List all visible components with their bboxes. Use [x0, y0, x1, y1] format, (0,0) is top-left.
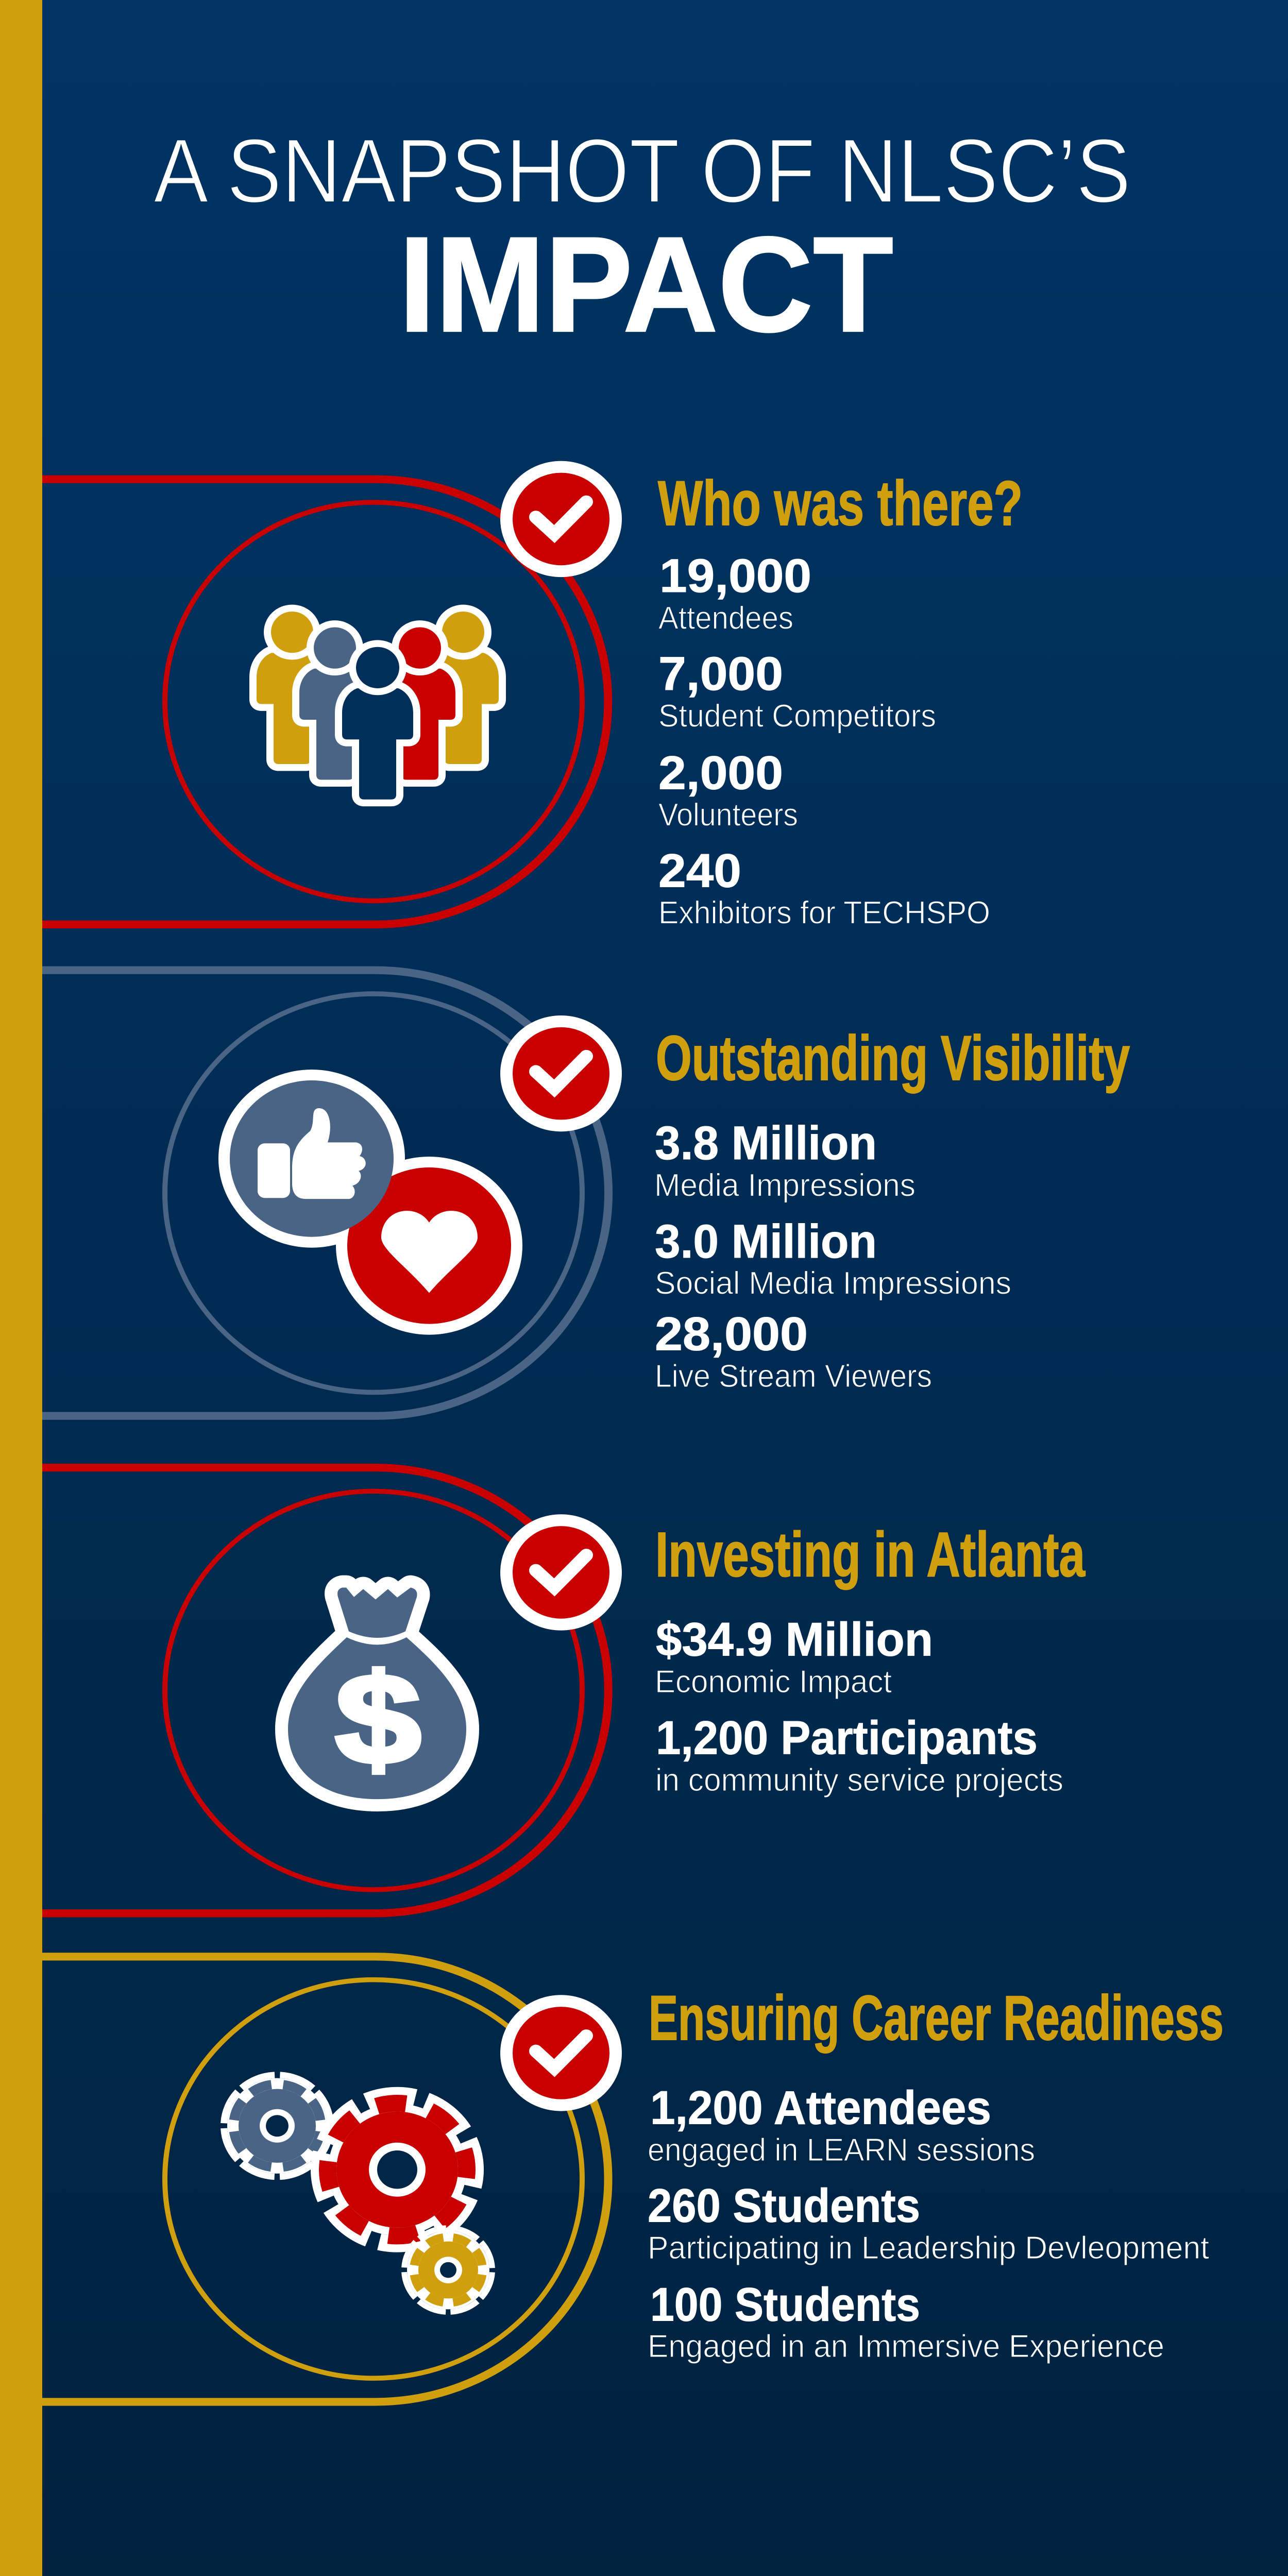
- panel: who was there: [42, 467, 1023, 930]
- stat label: Attendees: [658, 600, 793, 636]
- stat: 2,000: [658, 747, 783, 799]
- outer rounded frame: [42, 970, 608, 1416]
- icon: gold gear: [402, 2226, 495, 2314]
- inner ring: [165, 994, 582, 1392]
- panel: outstanding visibility: [42, 970, 1130, 1416]
- stat: $34.9 Million: [656, 1613, 933, 1666]
- stat: 100 Students: [650, 2278, 920, 2331]
- stat label: Live Stream Viewers: [655, 1358, 932, 1394]
- icon: money bag: [288, 1588, 466, 1799]
- stat label: Economic Impact: [655, 1664, 892, 1700]
- stat label: Exhibitors for TECHSPO: [658, 895, 990, 930]
- stat label: in community service projects: [655, 1762, 1063, 1798]
- gold side bar: [0, 0, 42, 2576]
- panel: ensuring career readiness: [42, 1957, 1224, 2402]
- icon: check badge: [506, 2001, 616, 2105]
- section text: [658, 468, 1023, 930]
- stat: 19,000: [659, 549, 811, 602]
- icon: red gear: [295, 2072, 499, 2267]
- section text: [655, 1519, 1086, 1798]
- stat label: Engaged in an Immersive Experience: [648, 2328, 1164, 2364]
- heading: Investing in Atlanta: [655, 1519, 1086, 1590]
- outer rounded frame: [42, 1468, 608, 1913]
- stat: 260 Students: [648, 2179, 920, 2232]
- stat: 1,200 Participants: [656, 1711, 1038, 1764]
- inner ring: [165, 1980, 582, 2378]
- outer rounded frame: [42, 479, 608, 924]
- stat label: Volunteers: [658, 797, 798, 833]
- title: [154, 120, 1131, 360]
- stat label: Participating in Leadership Devleopment: [648, 2230, 1209, 2266]
- inner ring: [165, 1491, 582, 1890]
- stat label: Student Competitors: [658, 698, 936, 734]
- stat: 7,000: [658, 647, 783, 700]
- icon: gears: [221, 2072, 499, 2314]
- icon: check badge: [506, 1021, 616, 1126]
- stat: 28,000: [655, 1307, 808, 1360]
- section text: [648, 1983, 1224, 2364]
- stat: 1,200 Attendees: [650, 2081, 991, 2134]
- section text: [654, 1023, 1130, 1394]
- icon: slate gear: [221, 2073, 333, 2179]
- icon: like and heart badges: [218, 1070, 522, 1335]
- icon: check badge: [506, 1520, 616, 1624]
- inner ring: [165, 502, 582, 901]
- stat: 3.0 Million: [655, 1215, 877, 1267]
- stat: 240: [658, 844, 741, 897]
- panel: investing in atlanta: [42, 1468, 1086, 1913]
- icon: check badge: [506, 467, 616, 571]
- stat label: engaged in LEARN sessions: [648, 2132, 1035, 2168]
- heading: Who was there?: [658, 468, 1023, 538]
- icon: group of people: [257, 612, 499, 800]
- icon: money bag: $: [335, 1648, 421, 1791]
- title line 1: A SNAPSHOT OF NLSC’S: [154, 120, 1131, 222]
- stat label: Social Media Impressions: [655, 1265, 1011, 1301]
- stat: 3.8 Million: [655, 1116, 877, 1169]
- stat label: Media Impressions: [654, 1167, 916, 1203]
- icon: thumbs up: [258, 1108, 366, 1199]
- outer rounded frame: [42, 1957, 608, 2402]
- icon: heart: [381, 1211, 478, 1293]
- title line 2: IMPACT: [399, 209, 893, 360]
